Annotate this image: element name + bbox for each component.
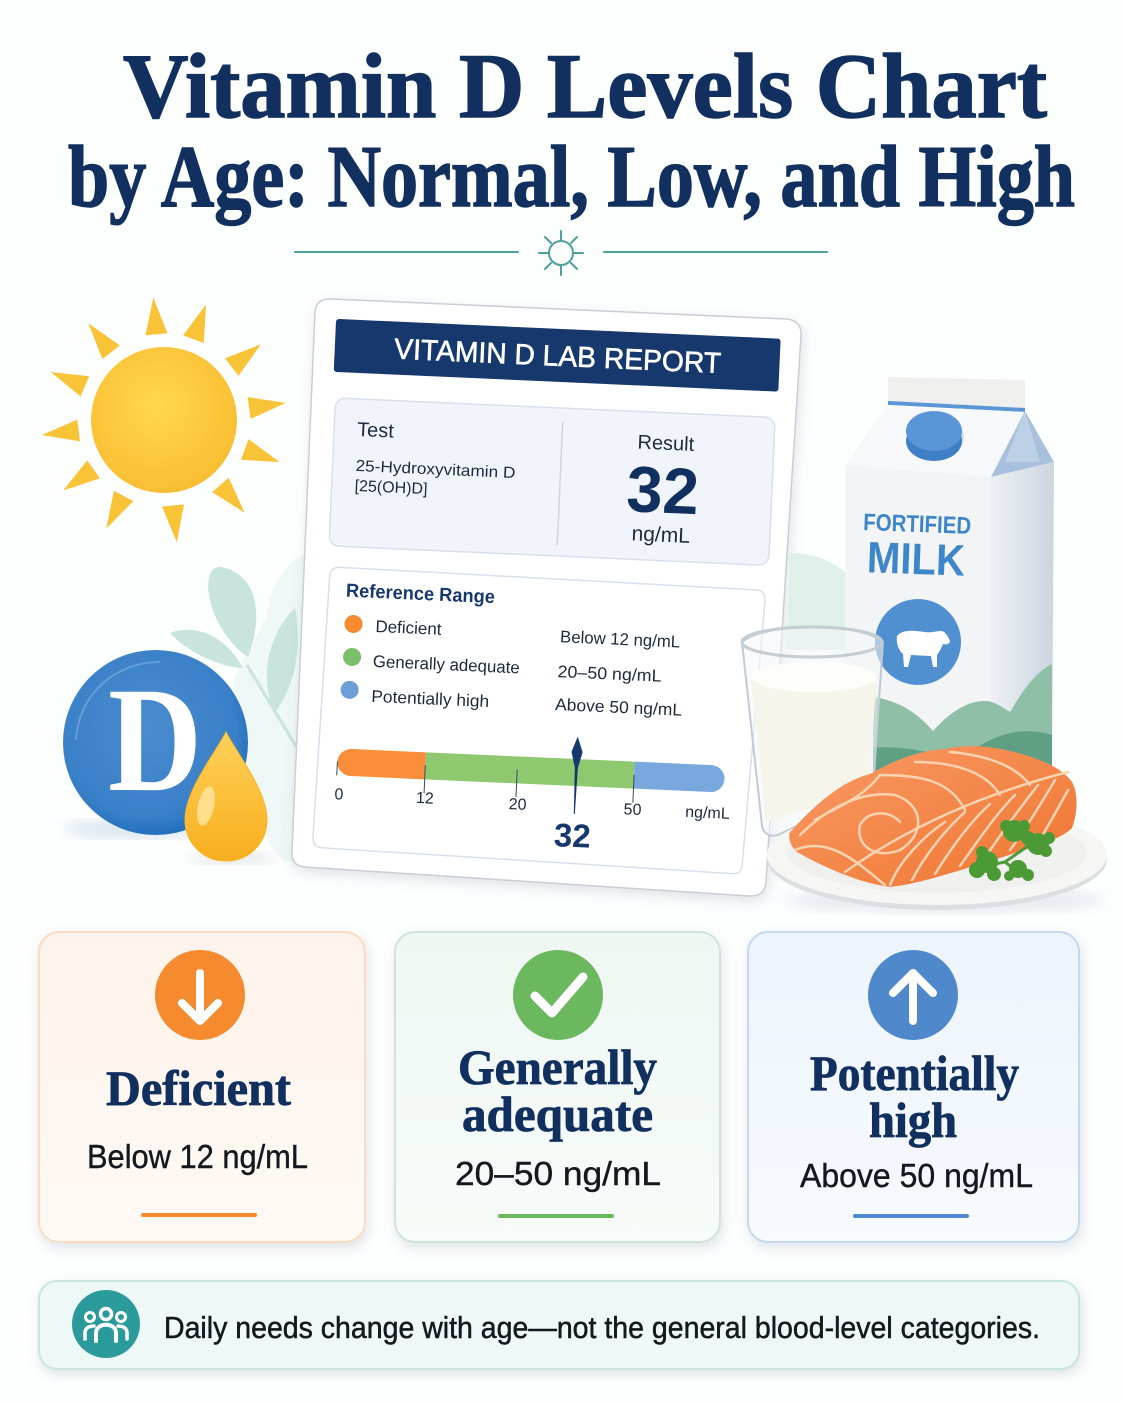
icon: down arrow xyxy=(155,950,245,1040)
range bar: 32 xyxy=(553,816,592,855)
test and result panel: Test xyxy=(357,419,395,443)
leaves behind the report xyxy=(170,553,320,862)
panel: generally adequate xyxy=(395,932,720,1242)
range bar: 50 xyxy=(623,801,642,819)
test and result panel: 32 xyxy=(625,452,701,528)
icon: glass of milk xyxy=(742,627,883,836)
icon: fortified milk carton: FORTIFIED xyxy=(863,509,972,540)
salmon fillet xyxy=(789,746,1077,887)
report header: VITAMIN D LAB REPORT xyxy=(394,334,722,380)
legend: potentially high: Above 50 ng/mL xyxy=(555,695,682,720)
icon: up arrow xyxy=(868,950,958,1040)
icon: fortified milk carton: MILK xyxy=(866,533,966,586)
reference range panel: Reference Range xyxy=(346,581,495,608)
callout: daily needs note xyxy=(39,1281,1079,1369)
range bar: 0 xyxy=(334,786,344,804)
test and result panel: ng/mL xyxy=(631,522,690,548)
legend: deficient: Deficient xyxy=(375,617,442,639)
legend: generally adequate: Generally adequate xyxy=(372,652,520,677)
legend: deficient xyxy=(344,615,681,652)
legend: potentially high: Potentially high xyxy=(371,687,490,711)
title: Vitamin D Levels Chart xyxy=(123,35,1047,137)
icon: vitamin D ball xyxy=(63,650,248,838)
icon: sun xyxy=(41,297,287,543)
panel: potentially high: Above 50 ng/mL xyxy=(800,1157,1033,1194)
test and result panel xyxy=(329,398,775,565)
icon: oil drop xyxy=(185,732,274,864)
range bar: 12 xyxy=(416,790,434,808)
range bar xyxy=(332,727,733,861)
panel: potentially high: Potentially xyxy=(810,1045,1019,1101)
legend: generally adequate xyxy=(342,648,662,686)
icon: check mark xyxy=(513,950,603,1040)
test and result panel: [25(OH)D] xyxy=(354,478,428,498)
test and result panel: Result xyxy=(637,431,695,456)
icon: people xyxy=(72,1290,140,1358)
legend: potentially high xyxy=(340,680,683,720)
panel: deficient: Deficient xyxy=(106,1060,291,1116)
panel: lab report card xyxy=(292,299,801,896)
legend: generally adequate: 20–50 ng/mL xyxy=(557,662,662,686)
icon: fortified milk carton xyxy=(787,377,1054,780)
panel: deficient xyxy=(39,932,365,1242)
range bar: 20 xyxy=(508,796,527,814)
icon: vitamin D ball: D xyxy=(108,657,202,823)
test and result panel: 25-Hydroxyvitamin D xyxy=(355,458,516,482)
panel: generally adequate: 20–50 ng/mL xyxy=(455,1155,661,1192)
panel: generally adequate: Generally xyxy=(458,1039,657,1095)
panel: deficient: Below 12 ng/mL xyxy=(87,1138,308,1175)
reference range panel xyxy=(312,567,766,875)
range bar: ng/mL xyxy=(685,804,730,823)
legend: deficient: Below 12 ng/mL xyxy=(560,627,680,652)
parsley garnish xyxy=(969,820,1055,881)
report header xyxy=(334,319,781,392)
icon: cow xyxy=(897,631,950,667)
icon: plate with salmon xyxy=(767,746,1107,912)
panel: potentially high: high xyxy=(869,1092,957,1148)
title xyxy=(68,35,1075,226)
title divider with sun icon xyxy=(295,231,827,275)
callout: daily needs note: Daily needs change with age—not the general blood-level categories. xyxy=(164,1310,1040,1345)
panel: generally adequate: adequate xyxy=(462,1086,653,1142)
panel: potentially high xyxy=(748,932,1079,1242)
